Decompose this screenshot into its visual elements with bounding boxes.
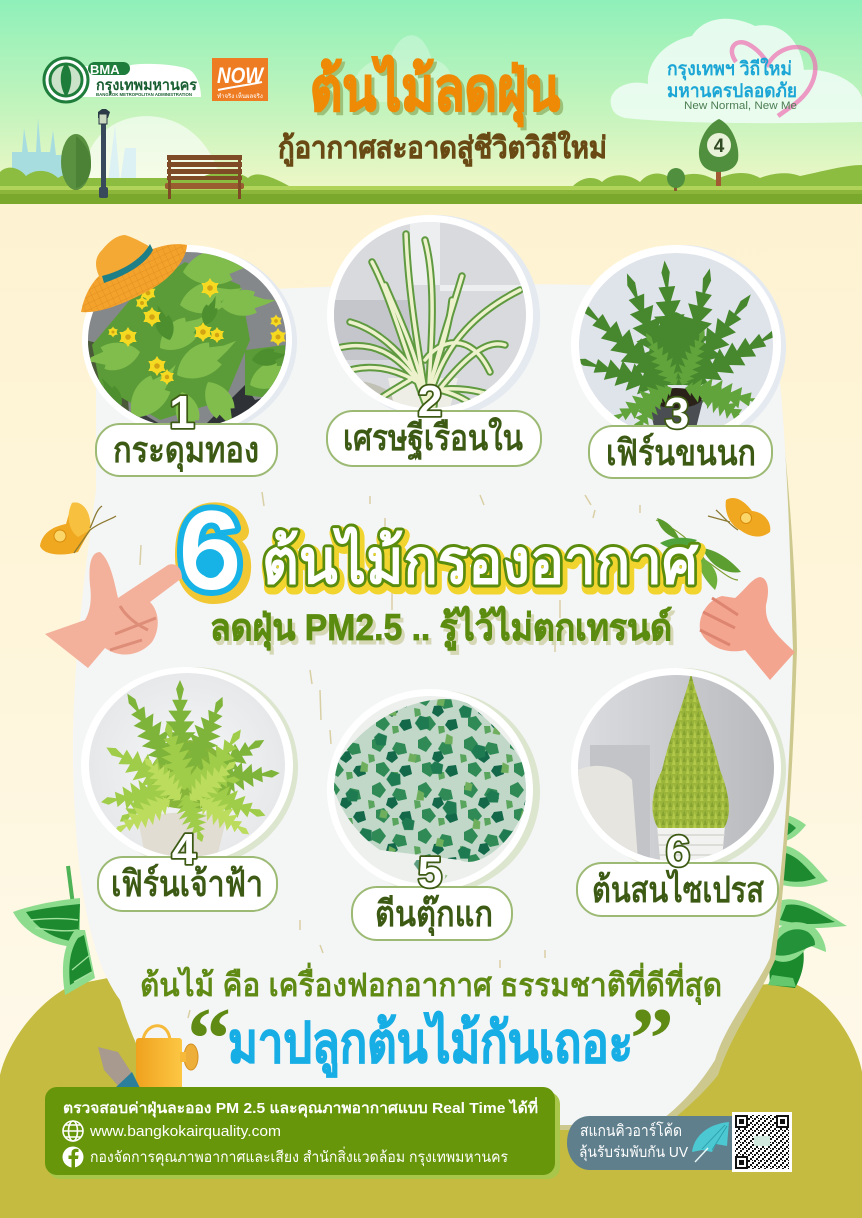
numeral 6: 6 <box>179 488 241 613</box>
info box: ตรวจสอบค่าฝุ่นละออง PM 2.5 และคุณภาพอากาศแบบ Real Time ได้ที่ <box>63 1097 538 1118</box>
numeral 6: 6 <box>182 491 244 616</box>
label 4: เฟิร์นเจ้าฟ้า <box>111 863 263 904</box>
main title: ลดฝุ่น PM2.5 .. รู้ไว้ไม่ตกเทรนด์ <box>210 605 672 651</box>
label 3: 3 <box>665 389 689 438</box>
heart outline <box>732 42 815 116</box>
photo frame 5 <box>327 689 540 895</box>
paper specks <box>140 492 640 1018</box>
main title: ต้นไม้กรองอากาศ <box>262 526 699 597</box>
right climbing leaves <box>768 812 847 988</box>
campaign text: กรุงเทพฯ วิถีใหม่ <box>667 57 792 81</box>
NOW logo: ทำจริง เห็นผลจริง <box>217 91 263 100</box>
call to action: ” <box>630 991 674 1088</box>
umbrella QR pill: สแกนคิวอาร์โค้ด <box>580 1121 682 1140</box>
paper shadow <box>560 430 797 1130</box>
label 3: เฟิร์นขนนก <box>606 432 756 473</box>
label 6: ต้นสนไซเปรส <box>592 868 764 910</box>
right bushes <box>568 165 862 192</box>
right tree with badge <box>699 119 738 186</box>
label 2: 2 <box>418 377 442 426</box>
BMA logo: BMA <box>90 62 120 77</box>
BMA logo <box>44 58 201 102</box>
decorative leaf sprig <box>656 518 741 590</box>
label 5: 5 <box>418 848 442 897</box>
right hill <box>500 982 862 1218</box>
tree left <box>61 134 91 190</box>
photo frame 6 <box>571 665 786 872</box>
plant photo: Boston fern <box>89 673 285 856</box>
street lamp <box>98 109 110 198</box>
label 1: กระดุมทอง <box>113 429 259 473</box>
NOW logo <box>212 58 268 101</box>
call to action <box>187 991 674 1088</box>
plant photo: creeping fig <box>334 696 526 884</box>
globe icon <box>63 1121 83 1141</box>
straw hat <box>81 235 187 312</box>
city skyline <box>12 118 136 182</box>
paper <box>73 284 793 1125</box>
umbrella QR pill: ลุ้นรับร่มพับกัน UV <box>579 1144 688 1162</box>
call to action: “ <box>187 991 231 1088</box>
main title <box>179 488 741 655</box>
NOW logo: NOW <box>217 63 265 88</box>
photo frame 2 <box>327 215 540 410</box>
info box: กองจัดการคุณภาพอากาศและเสียง สำนักสิ่งแวดล้อม กรุงเทพมหานคร <box>90 1146 508 1167</box>
left climbing leaves <box>13 866 95 995</box>
campaign text <box>667 57 797 112</box>
right tree with badge: 4 <box>714 136 725 157</box>
photo frame 3 <box>571 245 786 425</box>
subtitle: ลดฝุ่น PM2.5 .. รู้ไว้ไม่ตกเทรนด์ <box>213 609 675 655</box>
call to action: มาปลูกต้นไม้กันเถอะ <box>228 1010 633 1078</box>
plant photo: yellow flowers <box>88 252 286 423</box>
umbrella QR pill <box>567 1116 745 1170</box>
info box <box>45 1087 560 1179</box>
label 6 <box>577 827 778 916</box>
photo frame 4 <box>81 665 298 870</box>
BMA logo: BANGKOK METROPOLITAN ADMINISTRATION <box>96 92 192 97</box>
right small bush <box>667 168 685 191</box>
QR code <box>732 1112 792 1172</box>
plant photo: cypress <box>578 675 774 861</box>
campaign text: มหานครปลอดภัย <box>667 81 797 102</box>
label 5 <box>352 848 512 940</box>
right cloud <box>611 19 862 123</box>
umbrella icon <box>692 1122 729 1162</box>
bushes left <box>0 168 296 190</box>
header band <box>0 0 862 204</box>
campaign text: New Normal, New Me <box>684 100 797 112</box>
label 2 <box>327 377 541 466</box>
info box: www.bangkokairquality.com <box>89 1123 281 1140</box>
photo frame 1 <box>82 245 297 423</box>
middle cloud <box>352 35 453 102</box>
butterfly left <box>40 503 116 554</box>
header title: ต้นไม้ลดฝุ่น <box>310 54 560 127</box>
left hill <box>0 960 300 1218</box>
tagline: ต้นไม้ คือ เครื่องฟอกอากาศ ธรรมชาติที่ดีที่สุด <box>140 962 722 1006</box>
facebook icon <box>62 1146 84 1168</box>
label 6: 6 <box>666 827 690 876</box>
bottom ground <box>0 1120 862 1218</box>
label 3 <box>589 389 772 478</box>
label 1: 1 <box>169 386 195 438</box>
label 4 <box>98 825 277 911</box>
label 1 <box>96 386 277 476</box>
lawn <box>0 186 862 204</box>
butterfly right <box>708 498 770 536</box>
BMA logo: กรุงเทพมหานคร <box>96 77 198 95</box>
background cloud left <box>85 116 220 182</box>
plant photo: spider plant <box>334 222 526 408</box>
label 2: เศรษฐีเรือนใน <box>343 416 523 461</box>
label 4: 4 <box>172 825 197 874</box>
thumbs up hand <box>700 577 795 680</box>
title text: ต้นไม้กรองอากาศ <box>264 530 701 601</box>
label 5: ตีนตุ๊กแก <box>375 893 493 937</box>
watering can <box>136 1026 198 1090</box>
bench <box>165 155 244 199</box>
garden shears <box>98 1047 140 1088</box>
header subtitle: กู้อากาศสะอาดสู่ชีวิตวิถีใหม่ <box>278 130 607 167</box>
plant photo: bird nest fern <box>579 253 773 425</box>
pointing hand <box>45 552 182 668</box>
